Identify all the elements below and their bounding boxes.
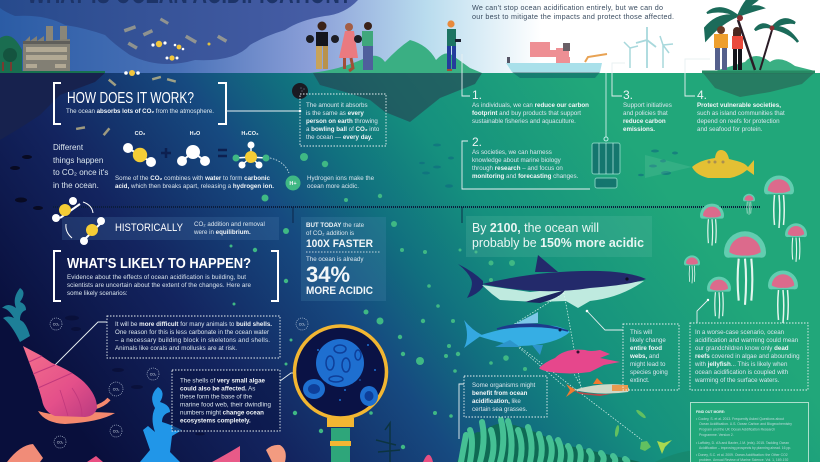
plankton bbox=[614, 409, 672, 454]
CO2 molecules falling bbox=[76, 18, 227, 136]
CO2 bubbles: CO₂ bbox=[57, 440, 64, 444]
hydrogen ions text: acid, which then breaks apart, releasing a hydrogen ion. bbox=[115, 183, 274, 190]
man standing bbox=[447, 20, 461, 71]
bowling ball comparison: person on earth throwing bbox=[306, 118, 378, 125]
but today stat panel bbox=[301, 217, 386, 301]
acidity note: ocean more acidic. bbox=[307, 183, 359, 190]
action 3 text: Support initiatives bbox=[623, 102, 672, 109]
callout: food webs: entire food bbox=[630, 345, 662, 352]
callout: worst case: with jellyfish... This is likely when bbox=[694, 361, 788, 368]
action 4 text: Protect vulnerable societies, bbox=[697, 102, 781, 109]
find out more panel: Program and the UK Ocean Acidification Research bbox=[699, 428, 775, 432]
research cage bbox=[592, 73, 620, 188]
action 4 text: and seafood for protein. bbox=[697, 126, 763, 133]
dark coral right bbox=[376, 423, 400, 462]
find out more panel: problem. Annual Review of Marine Science. Vol. 1, 169-192 bbox=[699, 458, 788, 462]
chemical formula diagram bbox=[123, 131, 289, 173]
different things text: Different bbox=[53, 143, 84, 152]
chemical formula diagram: CO₂ bbox=[135, 131, 146, 137]
CO2 bubbles: CO₂ bbox=[113, 388, 120, 392]
historically panel: were in equilibrium. bbox=[193, 229, 251, 236]
callout: worst case: reefs covered in algae and abounding bbox=[695, 353, 800, 360]
callout: worst case: warming of the surface waters. bbox=[694, 377, 780, 384]
sea snail bbox=[23, 346, 115, 424]
callout: small algae bbox=[172, 370, 280, 431]
action 1 text bbox=[462, 54, 589, 125]
find out more panel: Programme. Version 2. bbox=[699, 433, 734, 437]
left island bbox=[0, 71, 105, 140]
but today stat panel: MORE ACIDIC bbox=[306, 285, 373, 297]
whats likely heading: WHAT'S LIKELY TO HAPPEN? bbox=[67, 255, 251, 272]
food web connectors bbox=[500, 293, 642, 440]
callout: small algae: numbers might change ocean bbox=[180, 410, 264, 416]
but today stat panel: BUT TODAY the rate bbox=[306, 222, 365, 229]
callout: small algae: ecosystems completely. bbox=[180, 418, 251, 424]
faint fish schools bbox=[419, 144, 678, 188]
jellyfish bbox=[684, 176, 807, 323]
CO2 bubbles: CO₂ bbox=[53, 322, 60, 326]
bowling ball comparison: is the same as every bbox=[306, 110, 364, 117]
different things text: things happen bbox=[53, 156, 103, 165]
bowling ball comparison: the ocean — every day. bbox=[306, 134, 373, 141]
action 1 text: sustainable fisheries and aquaculture. bbox=[472, 118, 576, 125]
floating hydrogen ions bbox=[230, 153, 527, 449]
palm trees bbox=[705, 0, 798, 70]
hydrogen ion: H+ bbox=[289, 181, 297, 187]
callout: food webs: extinct. bbox=[630, 377, 650, 384]
blue algae bbox=[140, 387, 182, 462]
different things text bbox=[53, 143, 108, 190]
intro text: mitigation bbox=[472, 3, 674, 21]
action 1 text: 1. bbox=[472, 88, 482, 102]
callout: food webs: likely change bbox=[630, 337, 666, 344]
action 3 text: reduce carbon bbox=[623, 118, 666, 125]
find out more panel: FIND OUT MORE: bbox=[696, 410, 725, 414]
hydrogen ions text bbox=[115, 175, 274, 190]
dark fish upper bbox=[10, 155, 43, 210]
timeline ruler bbox=[53, 206, 760, 208]
callout: worst case bbox=[690, 299, 808, 390]
factory and trees bbox=[0, 26, 70, 72]
acidity note: Hydrogen ions make the bbox=[307, 175, 375, 182]
CO2 bubbles: CO₂ bbox=[299, 322, 306, 326]
action 2 text: knowledge about marine biology bbox=[472, 157, 562, 164]
2100 headline panel: By 2100, the ocean will bbox=[472, 220, 599, 235]
teal algae bbox=[2, 288, 30, 342]
callout: shell building: – a necessary building block in skeletons and shells. bbox=[115, 337, 270, 344]
find out more panel: • Doney, S.C. et al. 2009. Ocean Acidification: the Other CO2 bbox=[696, 453, 788, 457]
how does it work heading: The ocean absorbs lots of CO₂ from the atmosphere. bbox=[66, 108, 214, 115]
find out more panel bbox=[655, 402, 815, 462]
action 4 text: depend on reefs for protection bbox=[697, 118, 780, 125]
whats likely heading: some likely scenarios: bbox=[67, 290, 128, 297]
historically panel: CO₂ addition and removal bbox=[194, 221, 265, 228]
but today stat panel: 100X FASTER bbox=[306, 238, 373, 250]
find out more panel: Acidification – improving prospects by planning ahead. 16 pp. bbox=[699, 446, 791, 450]
CO2 bubbles: CO₂ bbox=[150, 372, 157, 376]
but today stat panel: The ocean is already bbox=[306, 256, 364, 263]
whats likely heading: Evidence about the effects of ocean acidification is building, but bbox=[67, 274, 246, 281]
whats likely heading bbox=[54, 251, 278, 301]
callout: sea grasses bbox=[459, 376, 547, 439]
historically panel: HISTORICALLY bbox=[115, 222, 184, 234]
cycle molecules bbox=[52, 197, 105, 245]
how does it work heading: HOW DOES IT WORK? bbox=[67, 90, 194, 107]
action 2 text: monitoring and forecasting changes. bbox=[472, 173, 579, 180]
but today stat panel: 34% bbox=[306, 262, 350, 287]
wind turbines bbox=[624, 27, 673, 68]
callout: sea grasses: certain sea grasses. bbox=[472, 406, 528, 413]
hills behind people bbox=[310, 40, 482, 73]
tuna bbox=[464, 312, 570, 355]
central-left island underwater bbox=[313, 73, 482, 122]
submarine bbox=[645, 150, 754, 178]
action 2 text: through research – and focus on bbox=[472, 165, 563, 172]
intro text: mitigation: our best to mitigate the impacts and protect those affected. bbox=[472, 12, 674, 21]
hydrogen ions text: Some of the CO₂ combines with water to form carbonic bbox=[115, 175, 271, 182]
callout: shell building bbox=[107, 316, 280, 358]
action 3 text: and policies that bbox=[623, 110, 668, 117]
chemical formula diagram: H₂O bbox=[190, 131, 201, 137]
bottom shells bbox=[7, 444, 286, 462]
action 2 text: As societies, we can harness bbox=[472, 149, 552, 156]
callout: sea grasses: Some organisms might bbox=[472, 382, 536, 389]
bowling ball bbox=[292, 83, 308, 99]
acidity note bbox=[307, 175, 375, 190]
action 3 text: 3. bbox=[623, 88, 633, 102]
callout: worst case: ocean acidification is coupled with bbox=[695, 369, 789, 376]
ship bbox=[506, 42, 607, 78]
CO2 bubbles: CO₂ bbox=[113, 430, 120, 434]
right island bbox=[702, 56, 815, 97]
action 1 text: footprint and buy products that support bbox=[472, 110, 581, 117]
action 4 text: 4. bbox=[697, 88, 707, 102]
callout: small algae: could also be affected. As bbox=[180, 386, 255, 392]
callout: sea grasses: benefit from ocean bbox=[472, 390, 528, 397]
but today stat panel: of CO₂ addition is bbox=[306, 230, 354, 237]
shark bbox=[458, 255, 646, 308]
sea grass bbox=[423, 420, 640, 462]
find out more panel: Ocean Acidification. U.S. Ocean Carbon and Biogeochemistry bbox=[699, 422, 792, 426]
squid bbox=[539, 350, 620, 374]
callout: food webs: might lead to bbox=[630, 361, 666, 368]
action 3 text bbox=[612, 63, 672, 133]
action 4 text bbox=[685, 59, 785, 133]
small fish bbox=[566, 378, 629, 397]
callout: food webs: species going bbox=[630, 369, 668, 376]
callout: shell building: It will be more difficult for many animals to build shells. bbox=[115, 321, 272, 328]
couple bbox=[714, 26, 743, 70]
action 2 text bbox=[462, 135, 590, 189]
snail callout line bbox=[54, 322, 107, 366]
faint dark fish and coral bbox=[65, 316, 205, 436]
callout: food webs: This will bbox=[630, 329, 652, 336]
CO2 cloud bbox=[0, 0, 358, 64]
different things text: to CO₂ once it's bbox=[53, 168, 108, 177]
find out more panel: • Laffoley, D. d'A and Baxter, J.M. (eds). 2015. Tackling Ocean bbox=[696, 441, 789, 445]
historically panel bbox=[62, 217, 279, 240]
magnifying glass bbox=[294, 326, 386, 462]
people with bowling balls bbox=[306, 22, 373, 71]
how does it work heading bbox=[54, 83, 226, 124]
callout: worst case: acidification and warming could mean bbox=[695, 337, 799, 344]
2100 headline panel: probably be 150% more acidic bbox=[472, 235, 644, 250]
sky background bbox=[0, 0, 820, 73]
callout: small algae: The shells of very small algae bbox=[180, 378, 266, 384]
callout: sea grasses: acidification, like bbox=[472, 398, 521, 405]
callout: small algae: marine food web, their dwindling bbox=[180, 402, 272, 408]
different things text: in the ocean. bbox=[53, 181, 99, 190]
bowling ball comparison: a bowling ball of CO₂ into bbox=[306, 126, 380, 133]
chemical formula diagram: H₂CO₃ bbox=[241, 131, 259, 137]
action 1 text: As individuals, we can reduce our carbon bbox=[472, 102, 589, 109]
callout: shell building: One reason for this is less carbonate in the ocean water bbox=[115, 329, 269, 336]
callout: food webs bbox=[586, 310, 679, 390]
hydrogen ion bbox=[286, 176, 300, 190]
whats likely heading: scientists are uncertain about the extent of the changes. Here are bbox=[67, 282, 252, 289]
callout: shell building: Animals like corals and mollusks are at risk. bbox=[115, 345, 237, 352]
action 4 text: such as island communities that bbox=[697, 110, 785, 117]
bowling ball comparison bbox=[299, 94, 386, 146]
callout: small algae: these form the base of the bbox=[180, 394, 252, 400]
callout: food webs: webs, and bbox=[629, 353, 660, 360]
intro text: mitigation: We can't stop ocean acidification entirely, but we can do bbox=[472, 3, 663, 12]
2100 headline panel bbox=[466, 216, 652, 257]
callout: worst case: our grandchildren know only dead bbox=[695, 345, 789, 352]
find out more panel: • Cooley, S. et al. 2013. Frequently Asked Questions about bbox=[696, 417, 784, 421]
callout: worst case: In a worse-case scenario, ocean bbox=[695, 329, 785, 336]
bowling ball comparison: The amount it absorbs bbox=[306, 102, 368, 109]
CO2 bubbles bbox=[50, 318, 308, 448]
action 3 text: emissions. bbox=[623, 126, 655, 133]
action 2 text: 2. bbox=[472, 135, 482, 149]
